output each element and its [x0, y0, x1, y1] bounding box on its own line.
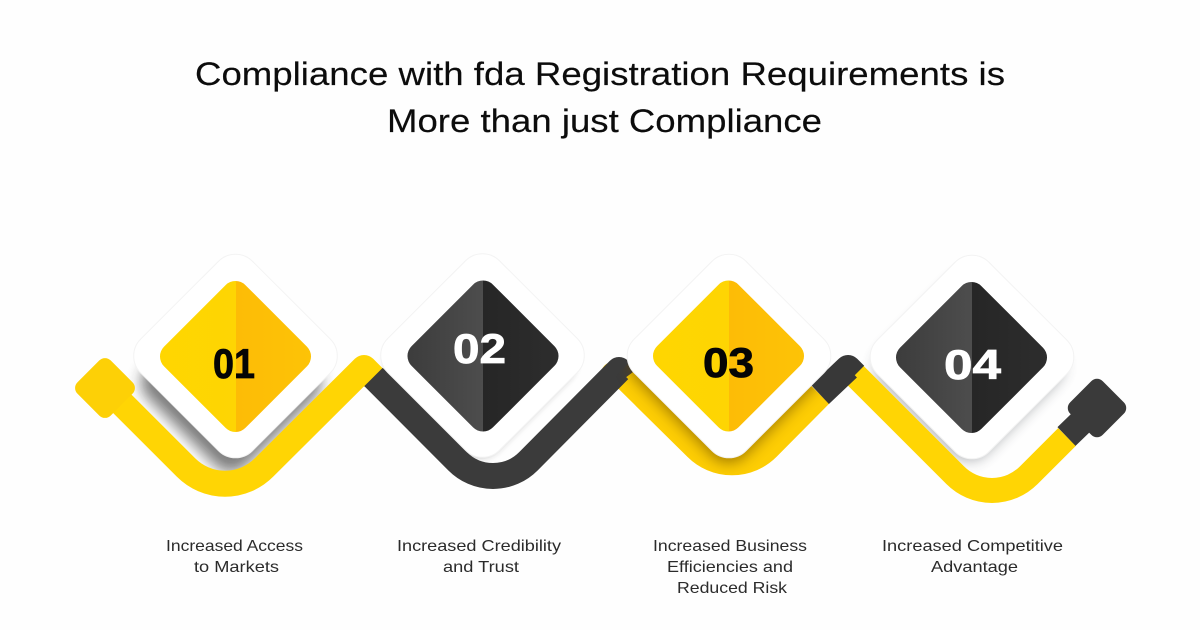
label 4: Increased Competitive [882, 538, 1063, 555]
label 2 [397, 538, 561, 576]
diamond 1 [160, 281, 311, 432]
diamond 4 [896, 282, 1047, 433]
label 4 [882, 538, 1063, 576]
step 2 [380, 254, 584, 458]
label 2: and Trust [443, 559, 520, 576]
title: Compliance with fda Registration Requirements is [195, 56, 1005, 92]
step 1 [134, 254, 338, 458]
connector band: segment 4 [853, 373, 1067, 490]
connector band: dark plug end [1064, 375, 1130, 441]
label 1: to Markets [194, 559, 279, 576]
shadows behind connector bands [132, 260, 1072, 481]
infographic canvas [75, 61, 1126, 593]
step 4 [871, 255, 1074, 460]
label 3: Increased Business [653, 538, 807, 555]
white tile 3 [617, 244, 841, 468]
number 03: 03 [703, 339, 754, 386]
connector band: segment 3 [601, 362, 820, 462]
label 3: Reduced Risk [677, 580, 788, 597]
diamond 2 [408, 280, 558, 432]
number 02: 02 [453, 325, 506, 372]
white tile 2 [371, 244, 594, 467]
connector band: dark joint between 3 and 4 [820, 368, 855, 394]
label 1: Increased Access [166, 538, 303, 555]
number 01: 01 [213, 340, 255, 387]
label 3: Efficiencies and [667, 559, 793, 576]
diamond 3 [653, 280, 804, 432]
white tile 1 [124, 244, 347, 468]
connector band: segment 2 [374, 370, 625, 476]
title [195, 56, 1005, 139]
title: More than just Compliance [387, 103, 822, 139]
connector band: segment 1 with plug head [72, 355, 373, 484]
white tile 4 [860, 245, 1084, 469]
label 3 [653, 538, 807, 597]
label 4: Advantage [931, 559, 1018, 576]
step 3 [627, 254, 831, 458]
number 04: 04 [944, 341, 1002, 388]
shadow of step 3 on band [624, 364, 819, 471]
label 2: Increased Credibility [397, 538, 561, 555]
label 1 [166, 538, 303, 576]
